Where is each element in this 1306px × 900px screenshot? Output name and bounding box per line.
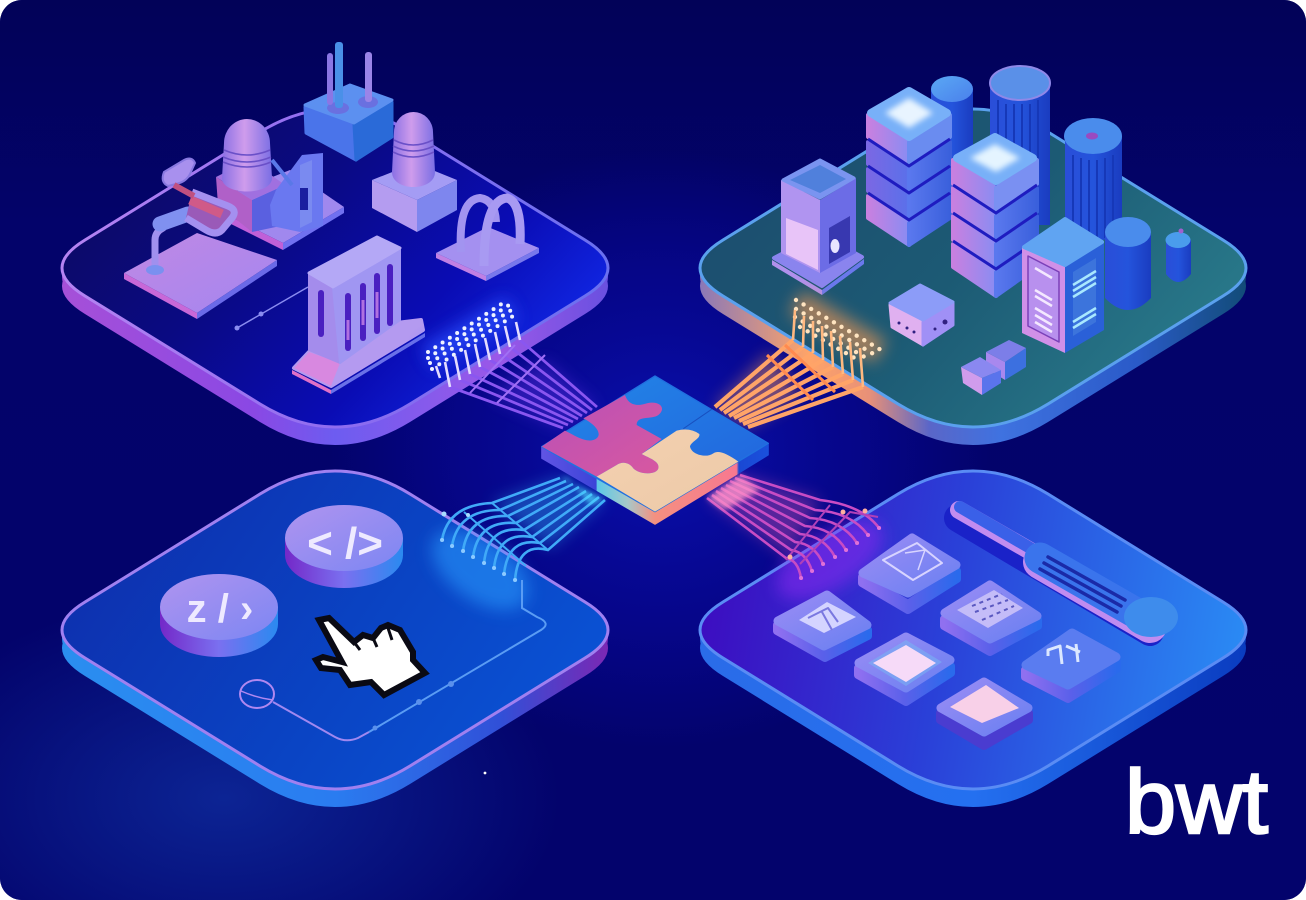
- puzzle seam: [683, 409, 712, 429]
- tile: glowing screen: [940, 682, 1029, 746]
- tile: pink screen: [858, 637, 951, 702]
- panel: data infrastructure (top right): [700, 66, 1246, 445]
- tile: chart: [862, 538, 957, 610]
- dot matrix: [428, 303, 516, 369]
- server stack A: [868, 91, 950, 245]
- small crates: [961, 340, 1026, 395]
- slider control: [958, 507, 1178, 637]
- peach piece: [597, 430, 738, 512]
- chimney block: [305, 42, 392, 160]
- platform: [700, 471, 1246, 807]
- panel: plant and machinery (top left): [62, 42, 608, 445]
- cursor hand: [316, 618, 425, 695]
- server stack B: [953, 137, 1037, 296]
- blue pieces: [542, 376, 768, 512]
- platform: [62, 471, 608, 807]
- puzzle side faces: [542, 443, 768, 524]
- ribbed cylinder with port: [1064, 118, 1122, 241]
- platform: [62, 109, 608, 445]
- arches on plate: [436, 198, 539, 281]
- small cylinders: [1105, 217, 1191, 310]
- code button: [285, 505, 403, 588]
- dotted track line: [234, 287, 308, 330]
- circuit line with ring: [240, 580, 546, 740]
- garbled code button: [160, 574, 278, 657]
- panel: code and interaction (bottom left): [62, 471, 608, 807]
- panel: control tiles (bottom right): [700, 471, 1246, 807]
- circuit glow: [418, 514, 542, 626]
- tile: diagram: [777, 595, 868, 658]
- dot matrix: [795, 300, 881, 360]
- connector: purple bundle: [436, 322, 597, 428]
- panel glow near connector: [764, 504, 896, 616]
- server rack: [1022, 219, 1104, 353]
- tile: symbol: [1025, 633, 1117, 699]
- kiosk: [772, 160, 864, 295]
- central puzzle: [542, 376, 768, 524]
- logo: bwt: [1125, 753, 1268, 853]
- connector: orange bundle: [715, 310, 863, 427]
- ribbed cylinder: [990, 66, 1050, 225]
- small cube: [890, 285, 953, 345]
- connector: pink bundle: [707, 475, 879, 578]
- platform: [700, 109, 1246, 445]
- radiator block: [292, 237, 425, 394]
- reactor tank with base: [205, 119, 344, 250]
- code button: < />: [307, 519, 383, 568]
- second tank on box: [372, 112, 457, 232]
- cylinder tall rear left: [931, 76, 973, 200]
- garbled code button: z / ›: [187, 587, 253, 631]
- magenta piece: [542, 395, 662, 477]
- robot arm plate: [124, 159, 277, 319]
- connector: cyan bundle: [442, 478, 605, 580]
- tile: list: [944, 585, 1038, 652]
